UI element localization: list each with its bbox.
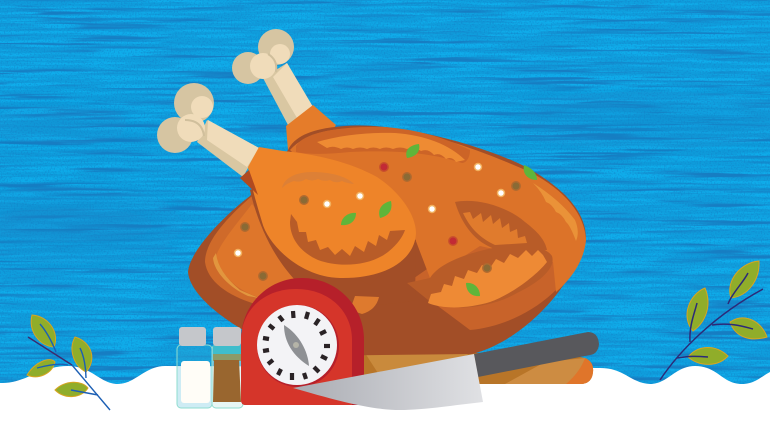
turkey: lower bone [157, 83, 259, 177]
herb sprig: right [660, 261, 767, 380]
spice: brown peppercorns [241, 173, 520, 280]
timer dial [257, 305, 339, 387]
turkey: upper drumstick stump [286, 105, 336, 150]
kitchen timer [241, 278, 364, 405]
knife [293, 332, 599, 410]
turkey [157, 29, 586, 356]
knife handle [474, 332, 599, 377]
turkey: upper wing [455, 201, 547, 250]
drumstick: crease [290, 214, 405, 265]
turkey: lower right band [407, 205, 586, 330]
turkey: left breast [205, 196, 320, 308]
leaves [687, 261, 767, 364]
herbs: green flakes [341, 144, 537, 296]
drumstick: upper shade [282, 172, 354, 188]
knife blade [293, 354, 483, 410]
dial ticks [263, 311, 330, 380]
drumstick: red stub [240, 170, 258, 195]
dial pointer [284, 325, 309, 366]
turkey: lower wing [407, 245, 553, 308]
herb sprig: left [27, 315, 110, 410]
salt and pepper shakers [177, 327, 243, 408]
turkey: dark body underside [188, 126, 586, 356]
spice: red peppercorns [380, 163, 457, 245]
stems [660, 273, 763, 380]
pepper shaker [212, 327, 243, 408]
turkey: drumstick shadow [250, 180, 416, 305]
turkey: small lower patch [350, 296, 379, 314]
leaves [27, 315, 92, 397]
cutting board [362, 353, 593, 384]
turkey: right pale strip [533, 183, 578, 241]
turkey: upper bone [232, 29, 313, 125]
stems [28, 324, 110, 410]
turkey: main body [290, 128, 586, 292]
turkey: top highlight [317, 133, 465, 162]
turkey: drumstick [240, 147, 416, 278]
white wavy ground [0, 366, 770, 430]
salt shaker [177, 327, 212, 408]
spice: white pearls [234, 164, 504, 256]
turkey: top back shade [296, 127, 470, 163]
